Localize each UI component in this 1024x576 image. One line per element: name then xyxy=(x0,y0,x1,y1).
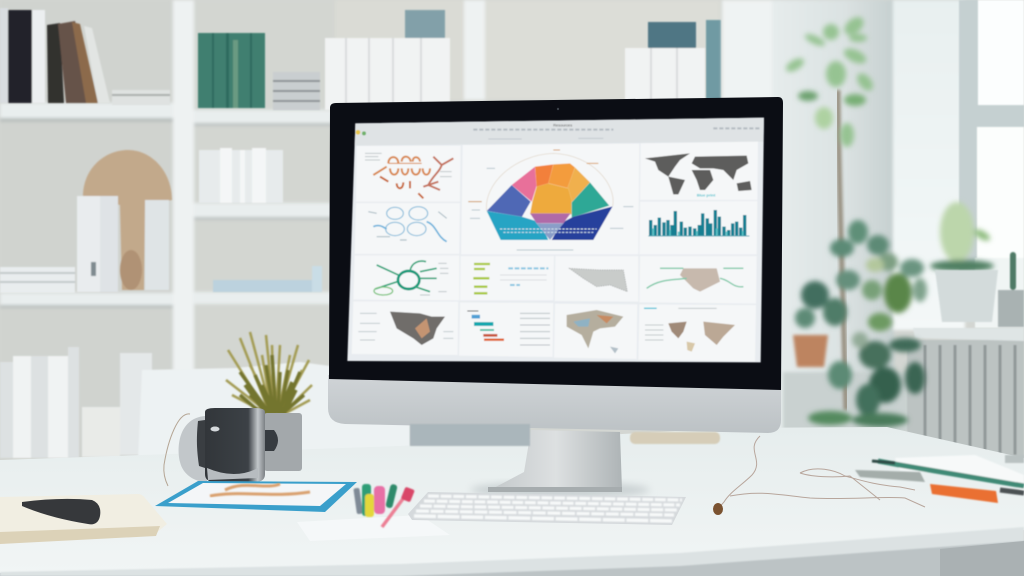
black wedge xyxy=(22,499,100,524)
pens xyxy=(353,484,415,527)
white papers xyxy=(895,455,1024,490)
stack of papers xyxy=(112,90,170,105)
mug body xyxy=(205,408,265,482)
bush xyxy=(795,220,927,427)
grey relief map xyxy=(358,312,453,345)
window xyxy=(959,0,1024,328)
dark and brown books xyxy=(47,23,64,103)
desk xyxy=(0,427,1024,576)
screen xyxy=(347,118,764,362)
small cactus pot xyxy=(998,252,1024,327)
mug handle xyxy=(179,416,207,482)
mug logo xyxy=(210,426,220,432)
monitor chin xyxy=(328,375,781,433)
window title: Resources xyxy=(553,122,572,127)
central rose chart xyxy=(487,163,613,240)
mug cord xyxy=(164,414,190,486)
keyboard xyxy=(408,492,686,525)
wires on desk xyxy=(717,436,925,510)
map caption: Blue print xyxy=(697,192,716,197)
monitor back shadow on desk xyxy=(470,482,650,498)
notebook xyxy=(0,494,167,544)
books on upper shelves xyxy=(0,8,721,292)
map with green routes xyxy=(647,268,743,292)
right knob xyxy=(265,430,278,451)
desk front edge shadow xyxy=(0,540,1024,576)
panels xyxy=(352,142,758,362)
chair back xyxy=(138,362,410,460)
mug xyxy=(164,408,278,486)
window title bar xyxy=(355,118,764,146)
monitor bezel xyxy=(329,97,783,390)
white pot xyxy=(935,270,998,322)
clipboard xyxy=(155,481,357,512)
grey pen xyxy=(353,488,363,514)
gantt bars xyxy=(467,311,550,345)
small world map xyxy=(644,308,735,352)
white binders xyxy=(0,8,8,103)
desk top xyxy=(0,427,1024,573)
white binders xyxy=(77,196,118,292)
terracotta pot xyxy=(793,335,828,367)
wooden disc xyxy=(83,150,172,290)
plant stem xyxy=(838,90,846,410)
process steps xyxy=(473,264,548,293)
app icon xyxy=(356,130,366,135)
world map dark xyxy=(645,153,752,194)
tall plant xyxy=(784,14,876,410)
monitor stand xyxy=(488,430,622,492)
desk items right xyxy=(855,455,1024,503)
doodle: orange flow diagram xyxy=(373,157,453,198)
green binders xyxy=(198,33,265,108)
bar chart xyxy=(648,210,749,236)
window-sill plant pot xyxy=(930,202,998,322)
grass xyxy=(226,332,312,414)
lower books xyxy=(0,362,13,458)
monitor xyxy=(328,97,783,433)
orange pen xyxy=(930,484,998,503)
radiator xyxy=(907,328,1024,458)
green yellow pen xyxy=(362,484,371,516)
green pen xyxy=(878,461,1024,486)
stuff behind monitor xyxy=(410,424,720,446)
white boxes xyxy=(199,150,283,203)
colour relief map xyxy=(567,310,623,353)
bookshelf: frame and shelves xyxy=(0,0,720,460)
webcam xyxy=(557,108,559,110)
green pen xyxy=(385,484,398,509)
plant leaves xyxy=(784,14,876,147)
grey map xyxy=(569,268,627,292)
pink long pen xyxy=(382,492,408,527)
pink pen xyxy=(374,486,385,514)
blue-grey book xyxy=(405,10,445,38)
sill plant leaves xyxy=(930,202,994,272)
white binders top xyxy=(325,38,450,110)
wire connector xyxy=(713,503,723,515)
right wall and shelf post xyxy=(722,0,965,432)
silver pot xyxy=(264,413,302,471)
green mind map xyxy=(374,261,448,295)
potted grass xyxy=(226,332,312,471)
desk front edge xyxy=(0,527,1024,576)
black binder xyxy=(8,10,32,103)
doodle: blue mind map xyxy=(368,207,447,242)
wooden disc and lower shelf items xyxy=(0,150,172,458)
paper under keyboard xyxy=(297,515,450,541)
grey stack xyxy=(273,72,320,110)
